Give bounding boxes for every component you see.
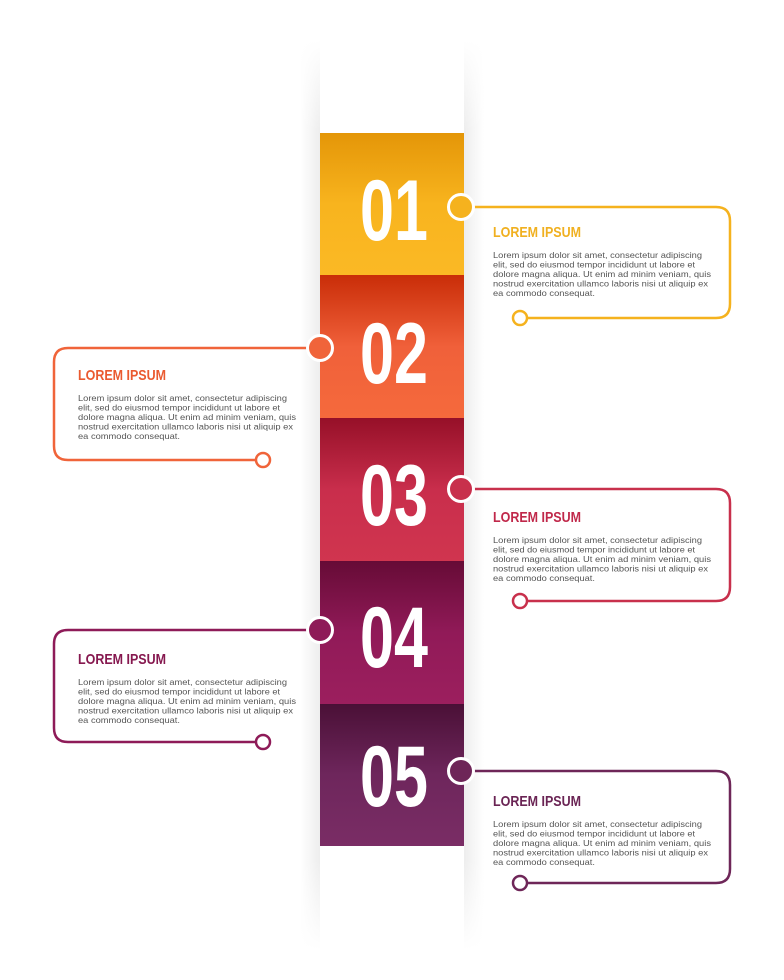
panel: step 05: dolore magna aliqua. Ut enim ad minim veniam, quis xyxy=(493,838,711,848)
panel: step 03: Lorem ipsum dolor sit amet, consectetur adipiscing xyxy=(493,535,702,545)
panel: step 01: Lorem ipsum dolor sit amet, consectetur adipiscing xyxy=(493,250,702,260)
panel: step 02: Lorem ipsum dolor sit amet, consectetur adipiscing xyxy=(78,393,287,403)
panel: step 03 xyxy=(448,476,730,608)
panel: step 05 xyxy=(448,758,730,890)
panel: step 01: nostrud exercitation ullamco laboris nisi ut aliquip ex xyxy=(493,278,709,288)
panel: step 01 xyxy=(448,194,730,325)
panel: step 05: ea commodo consequat. xyxy=(493,857,595,867)
panel: step 04: Lorem ipsum dolor sit amet, consectetur adipiscing xyxy=(78,677,287,687)
panel: step 04: ea commodo consequat. xyxy=(78,715,180,725)
panel: step 05: nostrud exercitation ullamco laboris nisi ut aliquip ex xyxy=(493,848,709,858)
step 01 segment: 01 xyxy=(360,162,428,258)
step 04 segment xyxy=(320,561,464,705)
panel: step 02: nostrud exercitation ullamco laboris nisi ut aliquip ex xyxy=(78,422,294,432)
panel: step 01: LOREM IPSUM xyxy=(493,224,581,241)
panel: step 03: LOREM IPSUM xyxy=(493,509,581,526)
panel: step 05: Lorem ipsum dolor sit amet, consectetur adipiscing xyxy=(493,819,702,829)
step 02 segment: 02 xyxy=(360,305,428,401)
panel: step 01: dolore magna aliqua. Ut enim ad minim veniam, quis xyxy=(493,269,711,279)
panel: step 01: elit, sed do eiusmod tempor incididunt ut labore et xyxy=(493,260,696,270)
panel: step 01: ea commodo consequat. xyxy=(493,288,595,298)
panel: step 05: LOREM IPSUM xyxy=(493,793,581,810)
step 05 segment xyxy=(320,704,464,846)
panel: step 04: LOREM IPSUM xyxy=(78,651,166,668)
panel: step 04: elit, sed do eiusmod tempor incididunt ut labore et xyxy=(78,686,281,696)
panel: step 02: elit, sed do eiusmod tempor incididunt ut labore et xyxy=(78,402,281,412)
column shadow strip xyxy=(298,40,486,950)
step 01 segment xyxy=(320,133,464,276)
panel: step 02 xyxy=(54,336,332,467)
step 02 segment xyxy=(320,275,464,419)
panel: step 03: nostrud exercitation ullamco laboris nisi ut aliquip ex xyxy=(493,564,709,574)
panel: step 04: nostrud exercitation ullamco laboris nisi ut aliquip ex xyxy=(78,706,294,716)
step 05 segment: 05 xyxy=(360,728,428,824)
panel: step 05: elit, sed do eiusmod tempor incididunt ut labore et xyxy=(493,828,696,838)
panel: step 02: ea commodo consequat. xyxy=(78,431,180,441)
panel: step 03: ea commodo consequat. xyxy=(493,573,595,583)
panel: step 03: elit, sed do eiusmod tempor incididunt ut labore et xyxy=(493,544,696,554)
panel: step 04: dolore magna aliqua. Ut enim ad minim veniam, quis xyxy=(78,696,296,706)
panel: step 02: LOREM IPSUM xyxy=(78,367,166,384)
step 03 segment: 03 xyxy=(360,447,428,543)
step 03 segment xyxy=(320,418,464,562)
panel: step 02: dolore magna aliqua. Ut enim ad minim veniam, quis xyxy=(78,412,296,422)
step 04 segment: 04 xyxy=(360,589,428,685)
panel: step 04 xyxy=(54,618,332,749)
panel: step 03: dolore magna aliqua. Ut enim ad minim veniam, quis xyxy=(493,554,711,564)
